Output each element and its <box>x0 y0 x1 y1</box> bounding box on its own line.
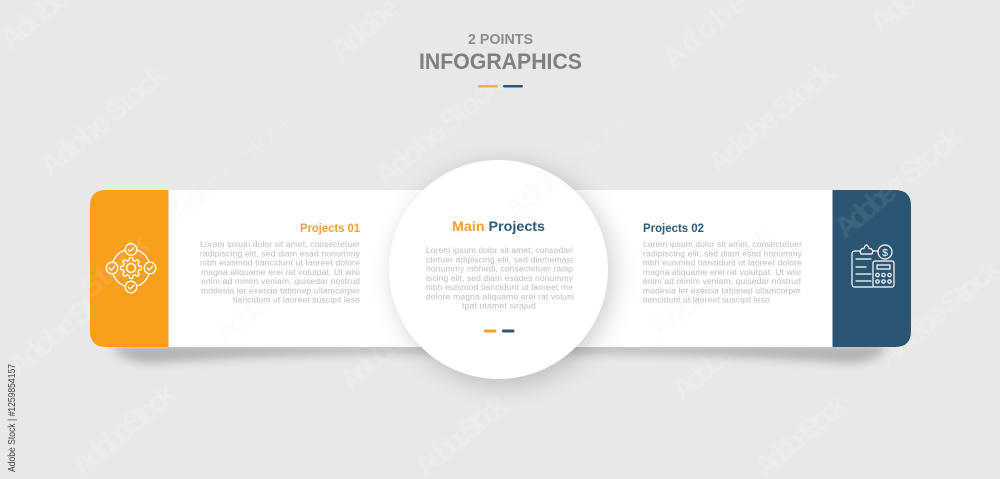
watermark over panels <box>73 102 903 350</box>
watermark pattern: Adobe Stock <box>368 68 508 193</box>
title line: infographics: INFOGRAPHICS <box>419 49 582 74</box>
body text: projects 01: enim ad minim veniam, quisedar nostrud <box>201 277 360 286</box>
clipboard <box>852 245 878 287</box>
body text: main projects: nibh euismod tiancidunt ut laoreet me <box>426 283 573 292</box>
panel: projects 02 text <box>643 221 802 304</box>
body text: main projects: ctetuer adipiscing elit, sed diamemasi <box>426 255 573 264</box>
title <box>419 31 582 88</box>
heading: main projects: Main Projects <box>452 218 545 234</box>
body text: projects 02 <box>643 240 802 304</box>
watermark pattern: Adobe Stock <box>701 55 841 180</box>
body text: projects 02: modesia ler exercia tationep ullamcorper <box>643 286 801 295</box>
body text: main projects: Lorem ipsum dolor sit amet, consedari <box>426 246 573 255</box>
dollar coin <box>878 245 892 259</box>
watermark over panels: Adobe Stock <box>498 102 638 227</box>
watermark pattern: Adobe Stock <box>665 302 782 407</box>
watermark pattern: Adobe Stock <box>333 292 450 397</box>
main band panel <box>90 190 911 347</box>
panel: projects 01 text <box>200 221 360 304</box>
title accent dashes <box>478 85 523 88</box>
body text: projects 02: enim ad minim veniam, quisedar nostrud <box>643 277 801 286</box>
icon: clipboard with calculator and dollar coin: $ <box>882 247 888 259</box>
body text: projects 01: modesia ler exercia tationep ullamcorper <box>201 286 360 295</box>
body text: main projects <box>426 246 574 310</box>
heading: projects 01: Projects 01 <box>300 221 360 235</box>
watermark pattern: Adobe Stock <box>33 58 173 183</box>
circle shadow <box>395 166 613 384</box>
body text: projects 02: magna aliquame erei rat volutpat. Ut wisi <box>643 268 801 277</box>
watermark pattern: Adobe Stock <box>828 120 968 245</box>
body text: projects 02: radipiscing elit, sed diam esad nonummy <box>643 249 802 258</box>
watermark pattern: Adobe Stock <box>163 102 303 227</box>
body text: main projects: iscing elit, sed diam esades nonummy <box>426 274 573 283</box>
body text: projects 01 <box>200 240 360 304</box>
watermark over panels: Stock <box>73 228 156 305</box>
band shadow <box>112 345 888 363</box>
check badges <box>106 244 156 293</box>
white band <box>160 190 840 347</box>
blue end cap <box>832 190 911 347</box>
gear <box>121 258 141 278</box>
accent dashes <box>484 330 514 332</box>
body text: main projects: nonummy nibhedi, consectetuer radip <box>426 264 573 274</box>
center circle panel <box>389 160 608 379</box>
watermark pattern: Adobe Stock <box>498 102 638 227</box>
icon: clipboard with calculator and dollar coin <box>852 245 894 287</box>
watermark over panels: Adobe <box>828 175 903 245</box>
icon: gear with checkmarks <box>106 244 156 293</box>
stock id vertical text: Adobe Stock | #1259854157 <box>6 364 18 472</box>
watermark over panels: Adobe Stock <box>643 220 783 345</box>
calculator <box>873 261 894 287</box>
watermark over panels: Adobe Stock <box>208 254 314 350</box>
watermark over panels: Adobe Stock <box>163 102 303 227</box>
body text: main projects: dolore magna aliquame erei rat voluni <box>426 292 574 301</box>
body text: projects 01: Lorem ipsum dolor sit amet, consectetuer <box>200 240 360 249</box>
body text: projects 01: radipiscing elit, sed diam esad nonummy <box>200 249 360 258</box>
orange end cap <box>90 190 168 347</box>
title line: 2 points: 2 POINTS <box>468 31 533 48</box>
body text: projects 01: nibh euismod tiancidunt ut laoreet dolore <box>200 258 360 268</box>
body text: projects 01: tiancidunt ut laoreet suscipit leso <box>233 296 360 304</box>
heading: projects 02: Projects 02 <box>643 221 704 235</box>
body text: projects 02: Lorem ipsum dolor sit amet, consectetuer <box>643 240 802 249</box>
white circle <box>389 160 608 379</box>
body text: projects 01: magna aliquame erei rat volutpat. Ut wisi <box>201 268 360 277</box>
connector arcs <box>113 250 149 286</box>
watermark pattern: Adobe Sto <box>1 281 114 383</box>
body text: main projects: tpat utamet sirajud <box>462 302 536 310</box>
clipboard lines <box>856 259 871 281</box>
body text: projects 02: tiancidunt ut laoreet suscipit leso <box>643 296 770 304</box>
body text: projects 02: nibh euismod tiancidunt ut laoreet dolore <box>643 258 802 268</box>
